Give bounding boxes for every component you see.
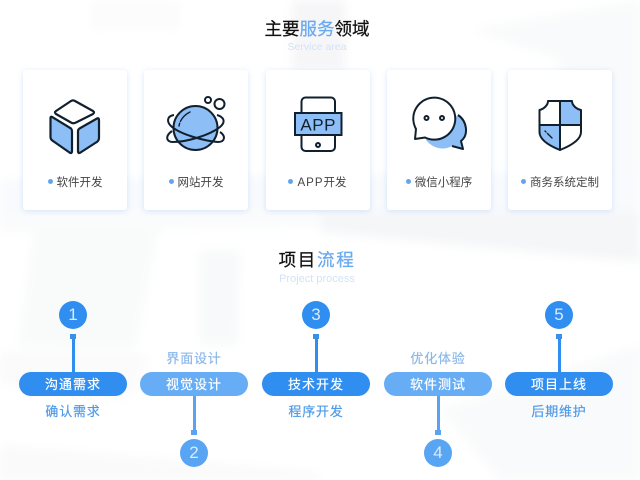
caption 2: 界面设计 xyxy=(166,351,222,366)
icon: planet xyxy=(166,96,226,151)
number circle 3 xyxy=(302,301,330,329)
number circle 5: 5 xyxy=(554,305,564,324)
pill 1 xyxy=(19,372,127,396)
number circle 2 xyxy=(180,439,208,467)
number circle 1 xyxy=(59,301,87,329)
title: 主要服务领域: 主要服务领域 xyxy=(264,19,370,39)
icon: phone APP: APP xyxy=(300,116,335,134)
label: 软件开发 xyxy=(56,177,102,189)
subtitle: Service area: Service area xyxy=(288,41,346,53)
connector cap 3 xyxy=(313,334,319,339)
pill 1: 沟通需求 xyxy=(45,377,101,392)
step 2 xyxy=(140,351,248,467)
icon: phone APP xyxy=(294,96,342,152)
number circle 3: 3 xyxy=(311,305,321,324)
icon: chat bubbles xyxy=(412,96,468,150)
pill 3: 技术开发 xyxy=(288,377,344,392)
number circle 1: 1 xyxy=(68,305,78,324)
step 4 xyxy=(384,351,492,467)
label: APP开发 xyxy=(297,177,346,189)
step 3 xyxy=(262,301,370,419)
connector cap 2 xyxy=(191,430,197,435)
connector 3 xyxy=(315,335,318,372)
connector 4 xyxy=(437,396,440,433)
number circle 2: 2 xyxy=(189,443,199,462)
label: 微信小程序 xyxy=(415,177,472,189)
pill 5 xyxy=(505,372,613,396)
connector 2 xyxy=(193,396,196,433)
pill 3 xyxy=(262,372,370,396)
number circle 4: 4 xyxy=(433,443,443,462)
panel: 商务系统定制 xyxy=(508,70,612,210)
number circle 5 xyxy=(545,301,573,329)
connector cap 1 xyxy=(70,334,76,339)
label: 商务系统定制 xyxy=(530,177,599,189)
step 5 xyxy=(505,301,613,419)
panel: 网站开发 xyxy=(144,70,248,210)
panel: 软件开发 xyxy=(23,70,127,210)
step 1 xyxy=(19,301,127,419)
connector 1 xyxy=(72,335,74,372)
icon: shield xyxy=(538,100,582,151)
connector cap 4 xyxy=(435,430,441,435)
pill 4: 软件测试 xyxy=(410,377,466,392)
caption 4: 优化体验 xyxy=(410,351,466,366)
subtitle: Project process: Project process xyxy=(279,273,355,285)
pill 2: 视觉设计 xyxy=(166,377,222,392)
number circle 4 xyxy=(424,439,452,467)
caption 3: 程序开发 xyxy=(288,404,344,419)
panel: APP开发 xyxy=(266,70,370,210)
pill 2 xyxy=(140,372,248,396)
label: 网站开发 xyxy=(178,177,224,189)
connector 5 xyxy=(558,335,560,372)
panel: 微信小程序 xyxy=(387,70,491,210)
caption 1: 确认需求 xyxy=(45,404,101,419)
title: 项目流程: 项目流程 xyxy=(279,250,355,270)
pill 5: 项目上线 xyxy=(531,377,587,392)
caption 5: 后期维护 xyxy=(531,404,587,419)
connector cap 5 xyxy=(556,334,562,339)
icon: cube xyxy=(49,99,100,154)
pill 4 xyxy=(384,372,492,396)
